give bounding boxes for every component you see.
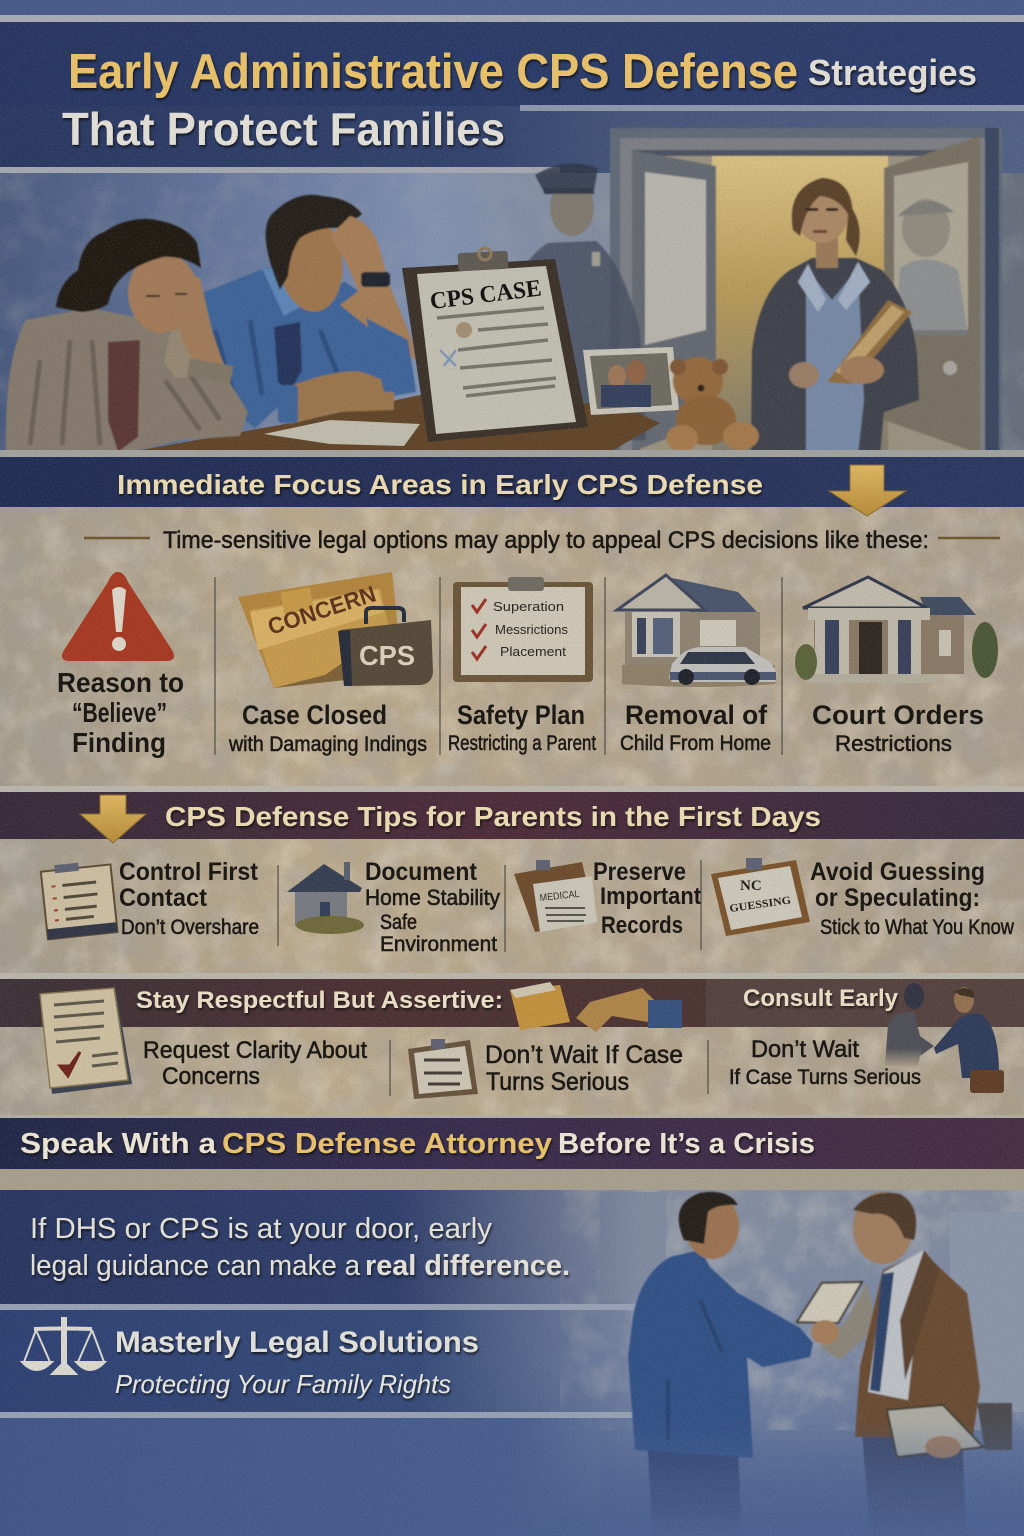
tip: document: Environment [380, 933, 497, 956]
icon: two people shaking hands [885, 983, 1004, 1093]
main title: That Protect Families [62, 103, 505, 155]
icon: safety plan clipboard [453, 577, 593, 682]
shadowy figure in doorway [896, 199, 968, 335]
brand name: Masterly Legal Solutions [115, 1326, 479, 1359]
man in blue shirt [167, 195, 416, 428]
man in brown jacket [820, 1192, 1012, 1536]
tip: avoid guessing: Avoid Guessing [810, 858, 985, 886]
icon: folder and handshake [510, 982, 682, 1032]
tagline: Protecting Your Family Rights [115, 1369, 451, 1399]
heading: stay respectful: Stay Respectful But Assertive: [136, 987, 503, 1014]
tip: request clarity: Request Clarity About [143, 1037, 367, 1064]
icon: safety plan clipboard: Superation [493, 599, 564, 614]
top strip [0, 0, 1024, 22]
tip: control first contact: Don’t Overshare [121, 916, 259, 939]
doorway [610, 128, 1002, 454]
icon: safety plan clipboard: Placement [500, 644, 566, 659]
call to action band [0, 1115, 1024, 1169]
illustration: two men meeting [600, 1192, 1024, 1536]
tip: don't wait if case: Don’t Wait If Case [485, 1041, 683, 1069]
item: case closed: with Damaging Indings [228, 733, 427, 756]
call to action heading: Before It’s a Crisis [558, 1128, 815, 1160]
tip: control first contact: Contact [119, 884, 208, 912]
icon: scales of justice [22, 1317, 105, 1374]
hero illustration [0, 128, 1024, 457]
clipboard: CPS case [402, 248, 588, 442]
tip: don't wait if case: Turns Serious [486, 1068, 629, 1096]
footer panel [0, 1169, 1024, 1536]
officer in background [508, 163, 646, 440]
teddy bear [666, 357, 759, 451]
icon: small house [287, 862, 364, 934]
item: removal [617, 575, 777, 755]
man in blue suit [628, 1192, 813, 1536]
text band: early guidance: real difference. [365, 1250, 570, 1282]
panel: tips [0, 839, 1024, 978]
header band [0, 22, 1024, 176]
icon: concern folder and CPS case: CPS [359, 640, 415, 671]
item: reason to believe [57, 572, 184, 758]
tip: request clarity [143, 1037, 367, 1090]
tip: preserve records: Records [601, 912, 683, 939]
call to action heading: CPS Defense Attorney [222, 1128, 552, 1160]
table [130, 395, 660, 452]
tip: preserve records [514, 858, 701, 939]
item: removal: Removal of [625, 700, 768, 730]
tip: avoid guessing [711, 858, 1015, 939]
heading: tips: CPS Defense Tips for Parents in the First Days [165, 801, 821, 832]
tip: preserve records: Preserve [593, 858, 686, 886]
icon: gold arrow down [829, 465, 906, 516]
icon: courthouse [795, 577, 998, 683]
section band: immediate focus [0, 457, 1024, 507]
item: case closed [228, 572, 433, 756]
icon: small clipboard [408, 1039, 478, 1099]
section band: tips [0, 786, 1024, 839]
item: court orders [795, 577, 998, 756]
tip: request clarity: Concerns [162, 1063, 260, 1090]
item: removal: Child From Home [620, 732, 771, 755]
tip: don't wait consult: Don’t Wait [751, 1036, 859, 1063]
icon: safety plan clipboard: Messrictions [495, 622, 568, 637]
band: respectful and consult [0, 973, 1024, 1027]
tip: document: Safe [380, 911, 417, 934]
main title: Early Administrative CPS Defense [68, 45, 798, 99]
icon: medical folder [514, 860, 597, 932]
item: case closed: Case Closed [242, 700, 387, 730]
tip: don't wait consult: If Case Turns Serious [729, 1066, 921, 1089]
text band: early guidance: legal guidance can make a [30, 1250, 361, 1282]
tip: don't wait consult [729, 1036, 921, 1089]
framed family photo [583, 347, 679, 415]
intro line: Time-sensitive legal options may apply to appeal CPS decisions like these: [163, 527, 929, 554]
item: safety plan: Restricting a Parent [448, 732, 596, 755]
panel: focus areas [0, 507, 1024, 787]
papers on desk [264, 420, 420, 446]
woman with folder [751, 178, 919, 454]
clipboard handed over [797, 1282, 862, 1323]
woman in cardigan [6, 219, 248, 452]
icon: checklist paper [40, 988, 132, 1094]
tip: avoid guessing: or Speculating: [815, 884, 980, 912]
icon: concern folder and CPS case [238, 572, 433, 688]
item: safety plan: Safety Plan [457, 700, 585, 730]
heading: immediate focus: Immediate Focus Areas in Early CPS Defense [117, 469, 763, 500]
item: reason to believe: Finding [72, 727, 166, 758]
item: court orders: Restrictions [835, 731, 952, 756]
panel: bottom tips [0, 1027, 1024, 1118]
icon: no guessing sign [711, 858, 810, 936]
text band: early guidance [0, 1190, 640, 1310]
item: safety plan [448, 577, 596, 755]
tip: don't wait if case [408, 1039, 683, 1099]
call to action heading: Speak With a [20, 1128, 217, 1160]
tip: document [287, 858, 500, 956]
brand band [0, 1310, 640, 1536]
item: reason to believe: Reason to [57, 667, 184, 698]
icon: gold arrow down tips [80, 795, 146, 843]
main title [62, 45, 977, 155]
tip: document: Home Stability [365, 885, 500, 910]
item: court orders: Court Orders [812, 700, 984, 730]
text band: early guidance: If DHS or CPS is at your door, early [30, 1213, 492, 1245]
icon: medical folder: MEDICAL [539, 889, 580, 904]
heading: consult early: Consult Early [743, 985, 899, 1012]
icon: no guessing sign: GUESSING [729, 894, 792, 915]
icon: warning triangle [62, 572, 174, 661]
tip: document: Document [365, 858, 478, 886]
item: reason to believe: “Believe” [72, 697, 167, 728]
icon: no guessing sign: NC [740, 878, 762, 894]
tip: preserve records: Important [600, 883, 701, 910]
icon: notepad [40, 859, 118, 939]
tip: control first contact: Control First [119, 858, 259, 886]
icon: house and car [617, 575, 777, 687]
icon: concern folder and CPS case: CONCERN [265, 580, 379, 640]
CPS CASE label: CPS CASE [429, 275, 543, 315]
hero background wall [0, 173, 1024, 453]
tip: control first contact [40, 858, 259, 939]
main title: Strategies [808, 52, 977, 93]
